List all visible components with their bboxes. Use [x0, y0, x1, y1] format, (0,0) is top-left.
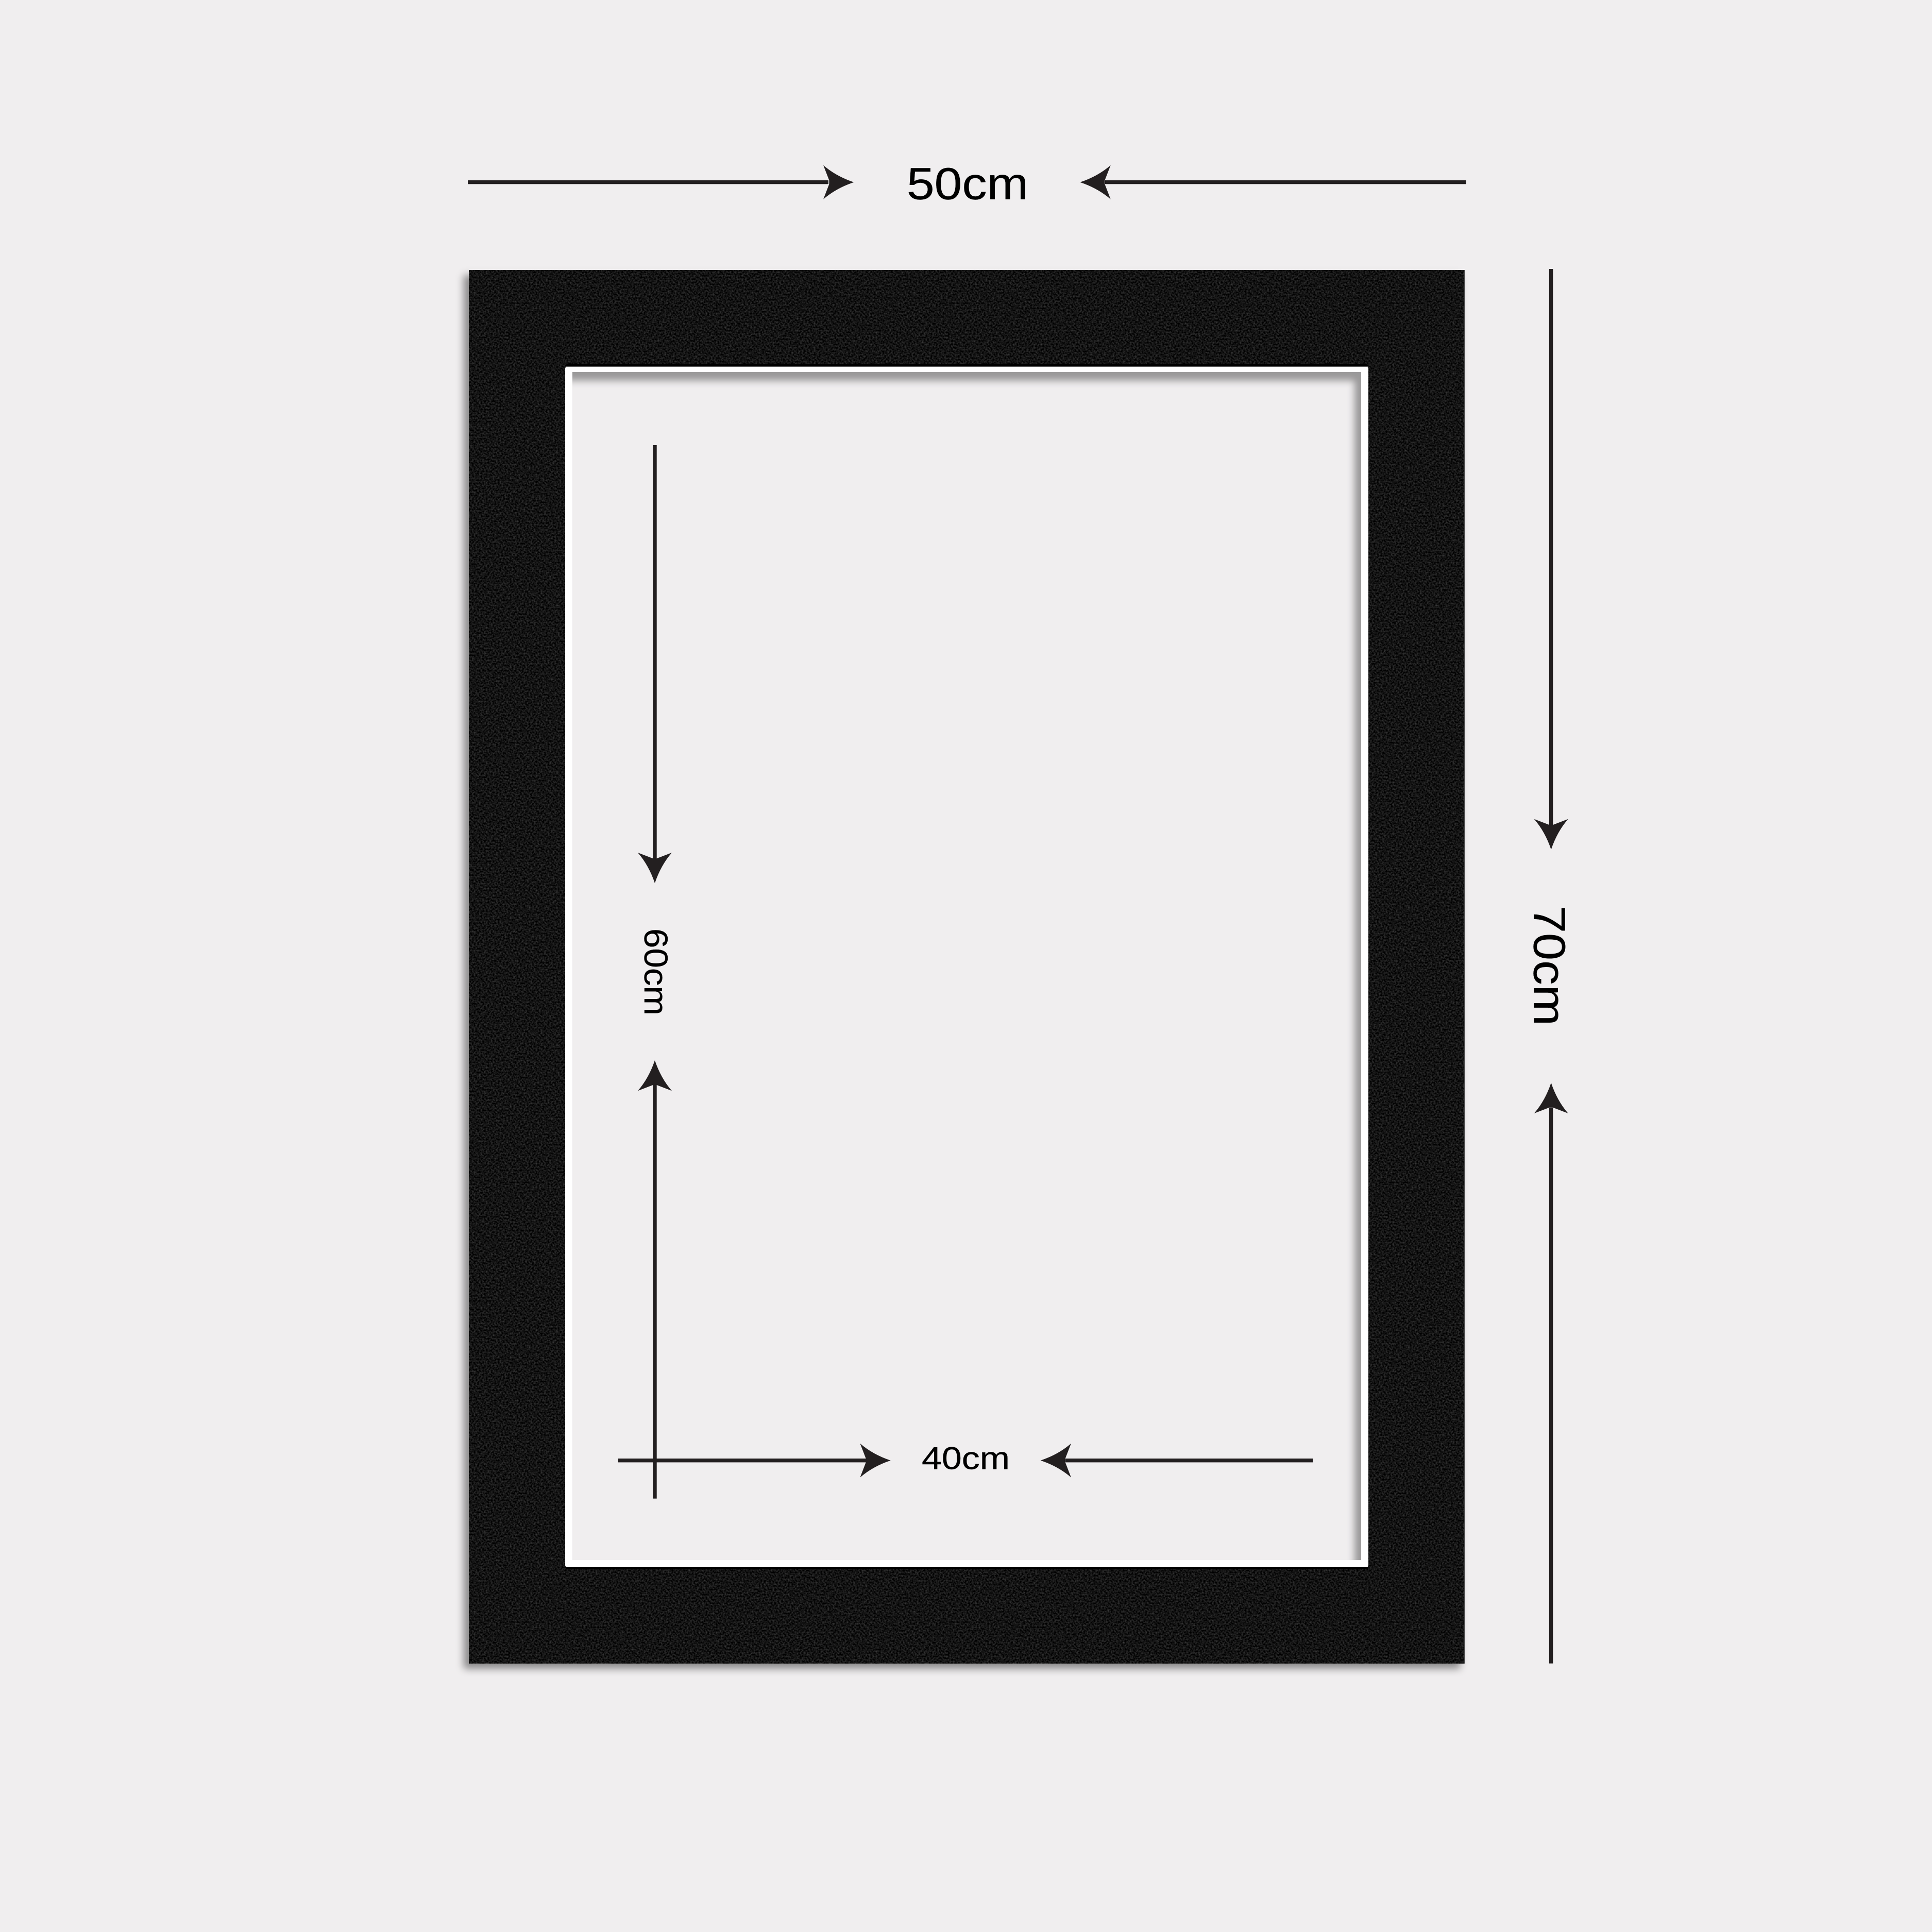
label: outer height 70cm: 70cm	[1524, 906, 1574, 1026]
arrow: inner width, left	[618, 1444, 891, 1478]
window opening with inner shadow	[572, 372, 1361, 1560]
arrow: outer width, left	[468, 165, 854, 199]
label: inner width 40cm: 40cm	[922, 1441, 1010, 1476]
arrow: outer height, top	[1534, 269, 1568, 850]
arrow: outer height, bottom	[1534, 1083, 1568, 1664]
arrow: inner width, right	[1041, 1444, 1313, 1478]
white bevel of the window	[565, 367, 1368, 1567]
label: outer width 50cm: 50cm	[907, 159, 1028, 209]
arrow: outer width, right	[1080, 165, 1466, 199]
arrow: inner height, top	[638, 445, 672, 883]
panel: black mat board	[469, 270, 1465, 1664]
label: inner height 60cm: 60cm	[637, 928, 674, 1015]
arrow: inner height, bottom	[638, 1060, 672, 1499]
